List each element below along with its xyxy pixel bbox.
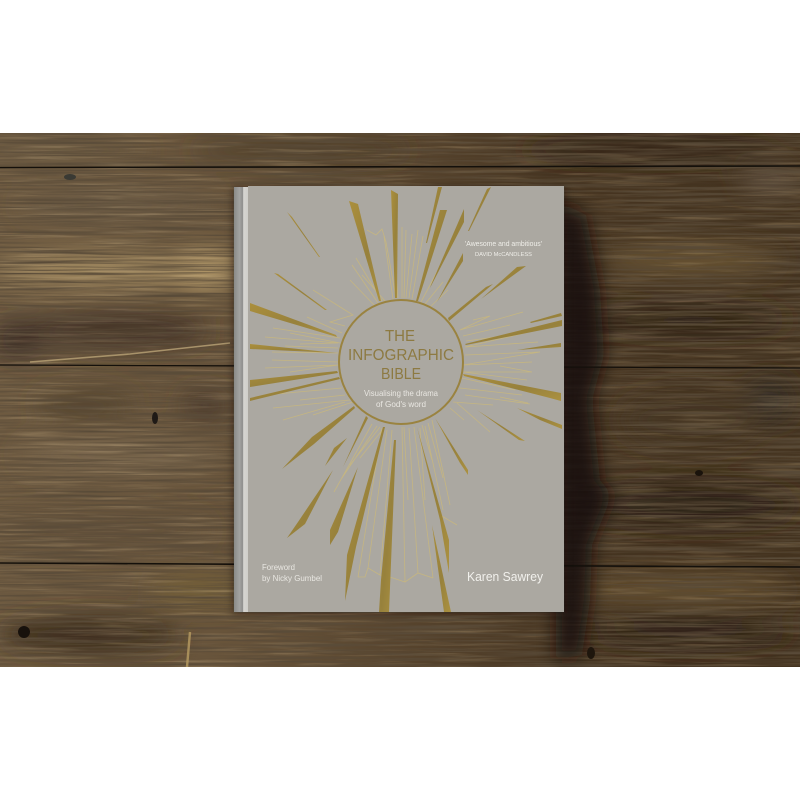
subtitle: Visualising the drama xyxy=(364,388,438,398)
endorsement quote xyxy=(465,239,543,258)
foreword credit xyxy=(262,563,322,583)
wood knots and scratches xyxy=(18,174,703,667)
fine gold sunburst lines xyxy=(265,227,540,582)
top rays xyxy=(287,212,320,257)
subtitle xyxy=(364,388,438,409)
left rays xyxy=(274,273,327,310)
author name: Karen Sawrey xyxy=(467,570,544,584)
title: BIBLE xyxy=(381,366,421,383)
plank seams xyxy=(0,166,800,567)
wooden table xyxy=(0,133,800,667)
subtitle: of God's word xyxy=(376,399,426,409)
book spine xyxy=(234,187,248,612)
title: INFOGRAPHIC xyxy=(348,347,454,364)
foreword credit: Foreword xyxy=(262,563,295,572)
gold sunburst rays xyxy=(250,187,562,612)
endorsement quote: DAVID McCANDLESS xyxy=(475,252,532,258)
book shadow edge xyxy=(233,188,565,613)
foreword credit: by Nicky Gumbel xyxy=(262,574,322,583)
book xyxy=(234,186,564,612)
right rays xyxy=(530,313,562,323)
book cast shadow on wood xyxy=(556,200,612,660)
endorsement quote: 'Awesome and ambitious' xyxy=(465,239,543,248)
title: THE xyxy=(385,328,415,345)
book cover xyxy=(248,186,564,612)
title xyxy=(348,328,454,383)
lower rays xyxy=(282,406,355,469)
central gold ring xyxy=(339,300,463,424)
